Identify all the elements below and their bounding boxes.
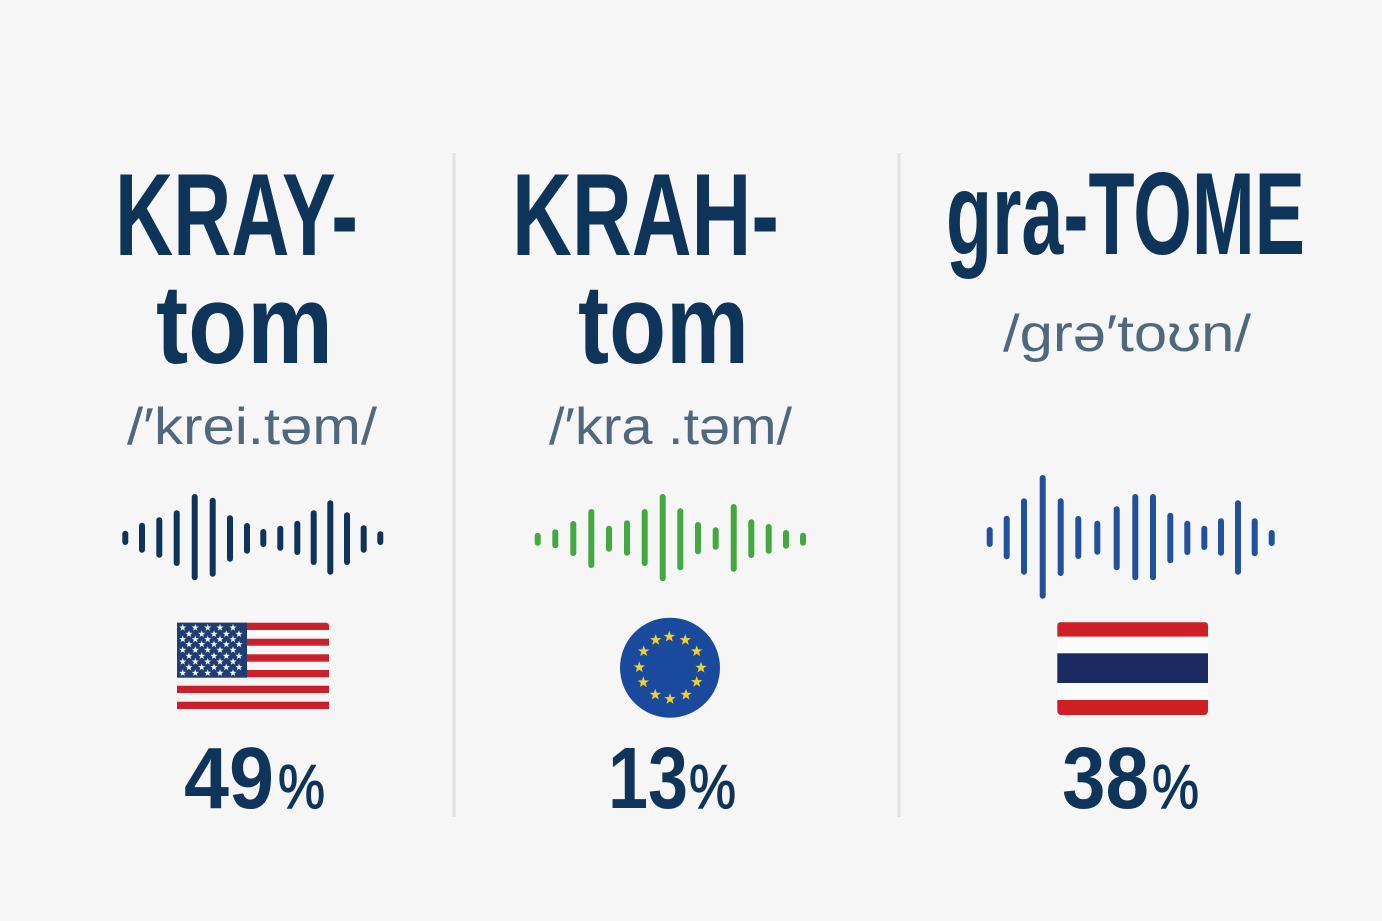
heading: KRAY-tom: KRAY- <box>115 149 358 280</box>
statistic: 38 percent: 38 <box>1062 730 1149 827</box>
statistic: 49 percent <box>184 730 325 827</box>
heading: KRAH-tom: KRAH- <box>512 149 779 280</box>
heading: KRAH-tom: tom <box>578 262 749 387</box>
heading: KRAY-tom: tom <box>156 262 333 387</box>
icon: European Union flag <box>620 618 720 718</box>
panel: Thai-origin pronunciation <box>946 148 1305 827</box>
icon: blue sound wave <box>987 475 1275 599</box>
icon: green sound wave <box>535 494 806 581</box>
statistic: 13 percent: % <box>689 753 736 822</box>
panel: American pronunciation <box>115 149 383 827</box>
heading: KRAY-tom <box>115 149 358 387</box>
statistic: 13 percent: 13 <box>608 730 688 827</box>
heading: KRAH-tom <box>512 149 779 387</box>
phonetic transcription: American: /′krei.təm/ <box>127 398 378 456</box>
panel: European pronunciation <box>512 149 806 827</box>
phonetic transcription: gra-TOME: /grə′toʊn/ <box>1003 305 1252 363</box>
statistic: 49 percent: 49 <box>184 730 274 827</box>
icon: United States flag <box>177 623 329 709</box>
icon: Thailand flag <box>1057 622 1208 715</box>
statistic: 38 percent: % <box>1152 753 1199 822</box>
phonetic transcription: European: /′kra .təm/ <box>549 398 793 456</box>
statistic: 49 percent: % <box>278 753 325 822</box>
icon: navy sound wave <box>122 494 383 580</box>
